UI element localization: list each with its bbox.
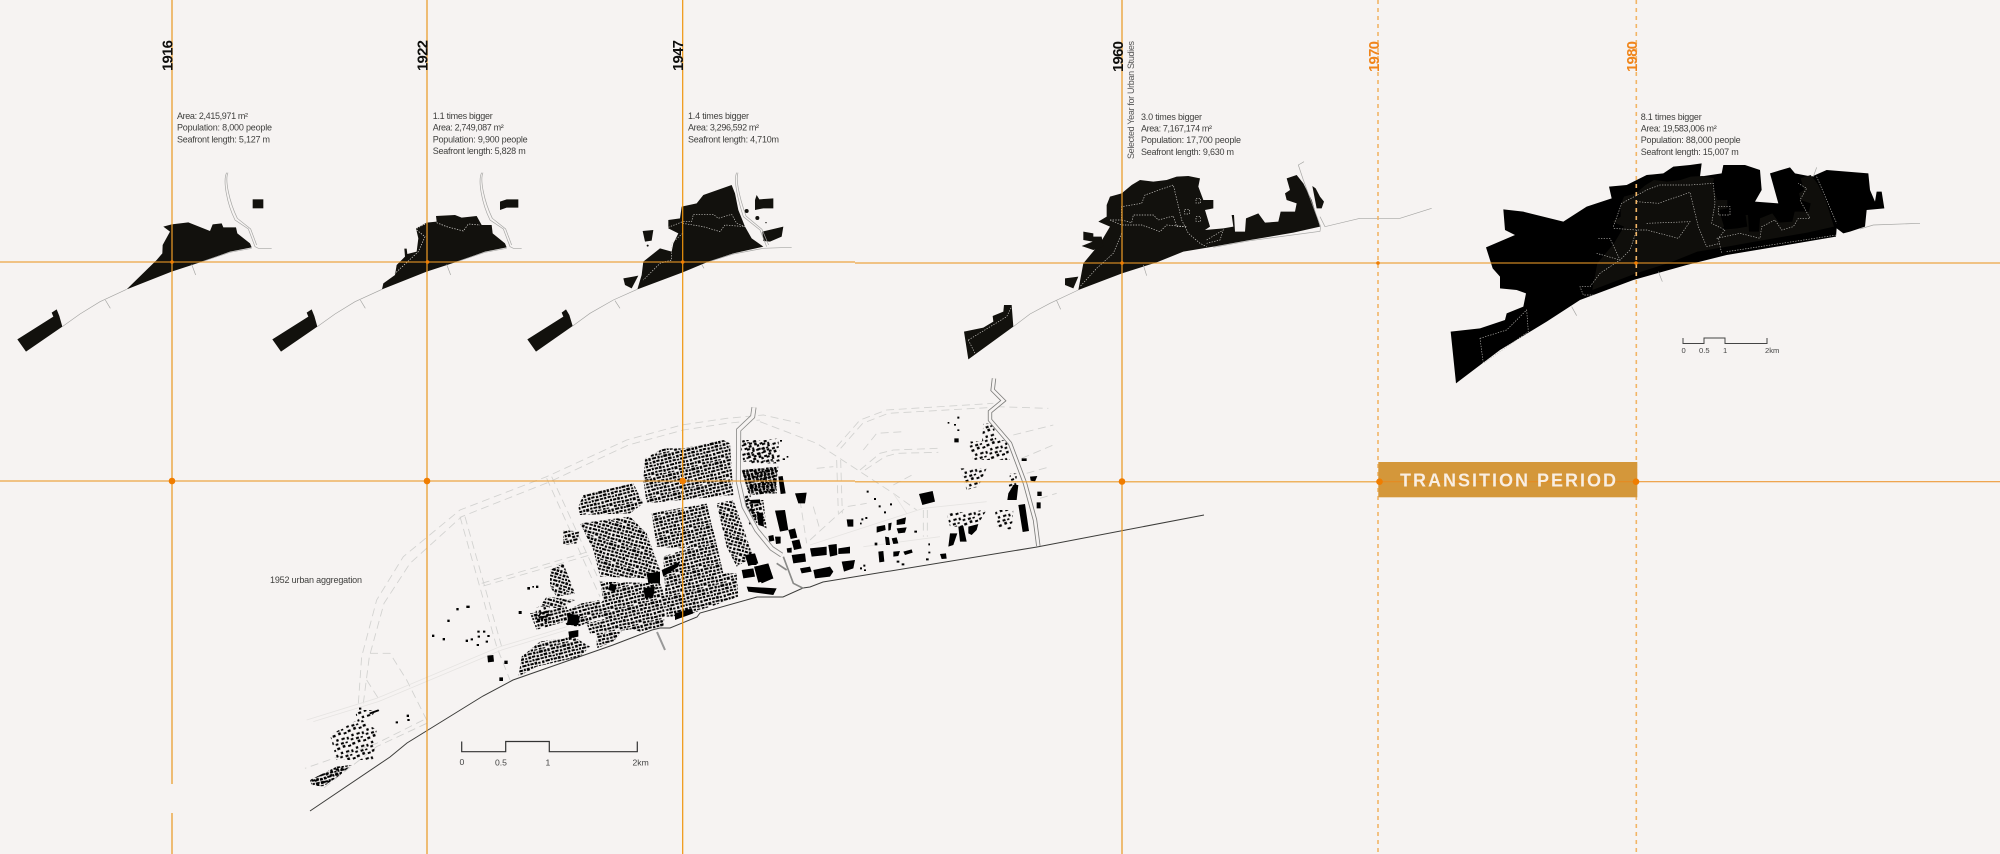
- map: 1980 footprint: [1451, 163, 1920, 383]
- stats: 1922: [433, 111, 528, 156]
- stats: 1947: 1.4 times bigger: [688, 111, 749, 121]
- scale bar: large: 1: [546, 758, 550, 768]
- large buildings: east: [745, 417, 1042, 583]
- scale bar: large: 0: [460, 757, 464, 767]
- year: 1980: 1980: [1624, 41, 1641, 72]
- banner: transition period: TRANSITION PERIOD: [1400, 471, 1616, 491]
- scale bar: small: 0: [1682, 346, 1686, 355]
- stats: 1980: 8.1 times bigger: [1641, 112, 1702, 122]
- year: 1922: 1922: [414, 40, 432, 71]
- stats: 1947: Seafront length: 4,710m: [688, 134, 779, 144]
- coastline: [310, 515, 1204, 811]
- scale bar: small: 2km: [1765, 346, 1779, 355]
- note: selected year: Selected Year for Urban Studies: [1126, 40, 1136, 159]
- stats: 1960: Seafront length: 9,630 m: [1141, 147, 1234, 157]
- stats: 1980: Population: 88,000 people: [1641, 135, 1741, 145]
- river east: [990, 378, 1038, 546]
- road network: [305, 415, 800, 788]
- map: 1952 urban aggregation, detailed: [270, 378, 1204, 811]
- scattered buildings: west and south-west: [359, 586, 580, 723]
- stats: 1922: 1.1 times bigger: [433, 111, 493, 121]
- stats: 1916: Population: 8,000 people: [177, 123, 272, 133]
- stats: 1960: [1141, 112, 1241, 157]
- scale bar: small: [1682, 338, 1779, 355]
- building blocks: east districts: [740, 423, 1017, 530]
- timeline: nodes: [169, 260, 1639, 485]
- stats: 1980: [1641, 112, 1741, 157]
- stats: 1947: [688, 111, 779, 144]
- stats: 1980: Area: 19,583,006 m²: [1641, 124, 1717, 134]
- label: 1952 urban aggregation: 1952 urban aggregation: [270, 575, 362, 585]
- map: 1947 footprint: [527, 173, 792, 352]
- timeline: vertical rules: [172, 0, 1636, 854]
- large buildings: centre: [567, 555, 777, 623]
- jetty: [657, 632, 665, 650]
- stats: 1980: Seafront length: 15,007 m: [1641, 147, 1739, 157]
- stats: 1916: [177, 111, 272, 144]
- banner: transition period: [1378, 462, 1637, 497]
- stats: 1960: Population: 17,700 people: [1141, 135, 1241, 145]
- river west: [738, 407, 803, 588]
- year: 1916: 1916: [160, 40, 176, 71]
- map: 1922 footprint: [272, 173, 522, 352]
- year: 1960: 1960: [1110, 41, 1127, 72]
- year: 1970: 1970: [1366, 41, 1383, 72]
- stats: 1916: Seafront length: 5,127 m: [177, 134, 270, 144]
- scale bar: small: 0.5: [1699, 346, 1710, 355]
- scale bar: large: [460, 742, 649, 768]
- scale bar: large: 0.5: [495, 758, 507, 768]
- stats: 1947: Area: 3,296,592 m²: [688, 123, 759, 133]
- year: 1947: 1947: [670, 40, 687, 71]
- stats: 1960: 3.0 times bigger: [1141, 112, 1202, 122]
- building blocks: textured districts: [310, 440, 777, 787]
- stats: 1922: Population: 9,900 people: [433, 134, 528, 144]
- map: 1916 footprint: [17, 173, 272, 352]
- timeline: horizontal rules: [0, 262, 2000, 482]
- stats: 1922: Area: 2,749,087 m²: [433, 123, 504, 133]
- stats: 1916: Area: 2,415,971 m²: [177, 111, 248, 121]
- map: 1960 footprint: [964, 162, 1432, 359]
- scale bar: large: 2km: [632, 758, 649, 768]
- stats: 1960: Area: 7,167,174 m²: [1141, 124, 1212, 134]
- stats: 1922: Seafront length: 5,828 m: [433, 146, 526, 156]
- scale bar: small: 1: [1723, 346, 1727, 355]
